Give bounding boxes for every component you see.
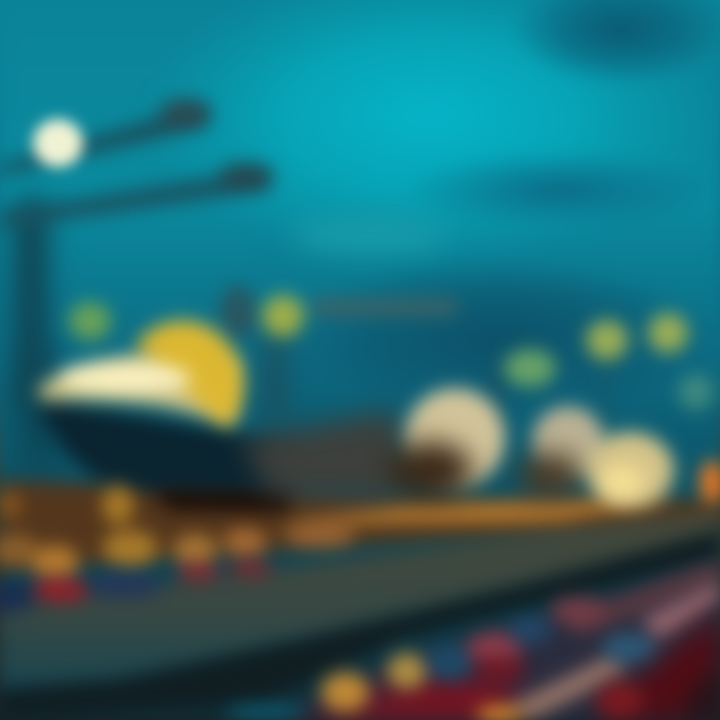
lower dark water	[0, 530, 720, 720]
ship	[40, 320, 410, 512]
foreground containers	[225, 560, 720, 720]
near row of containers	[0, 485, 356, 611]
crane light	[33, 119, 83, 167]
distant gantry	[220, 286, 610, 440]
domed tanks	[388, 388, 720, 508]
dock pier	[0, 510, 720, 690]
yellow signal lights	[69, 295, 714, 410]
crane	[0, 99, 271, 410]
quay deck	[0, 480, 720, 570]
